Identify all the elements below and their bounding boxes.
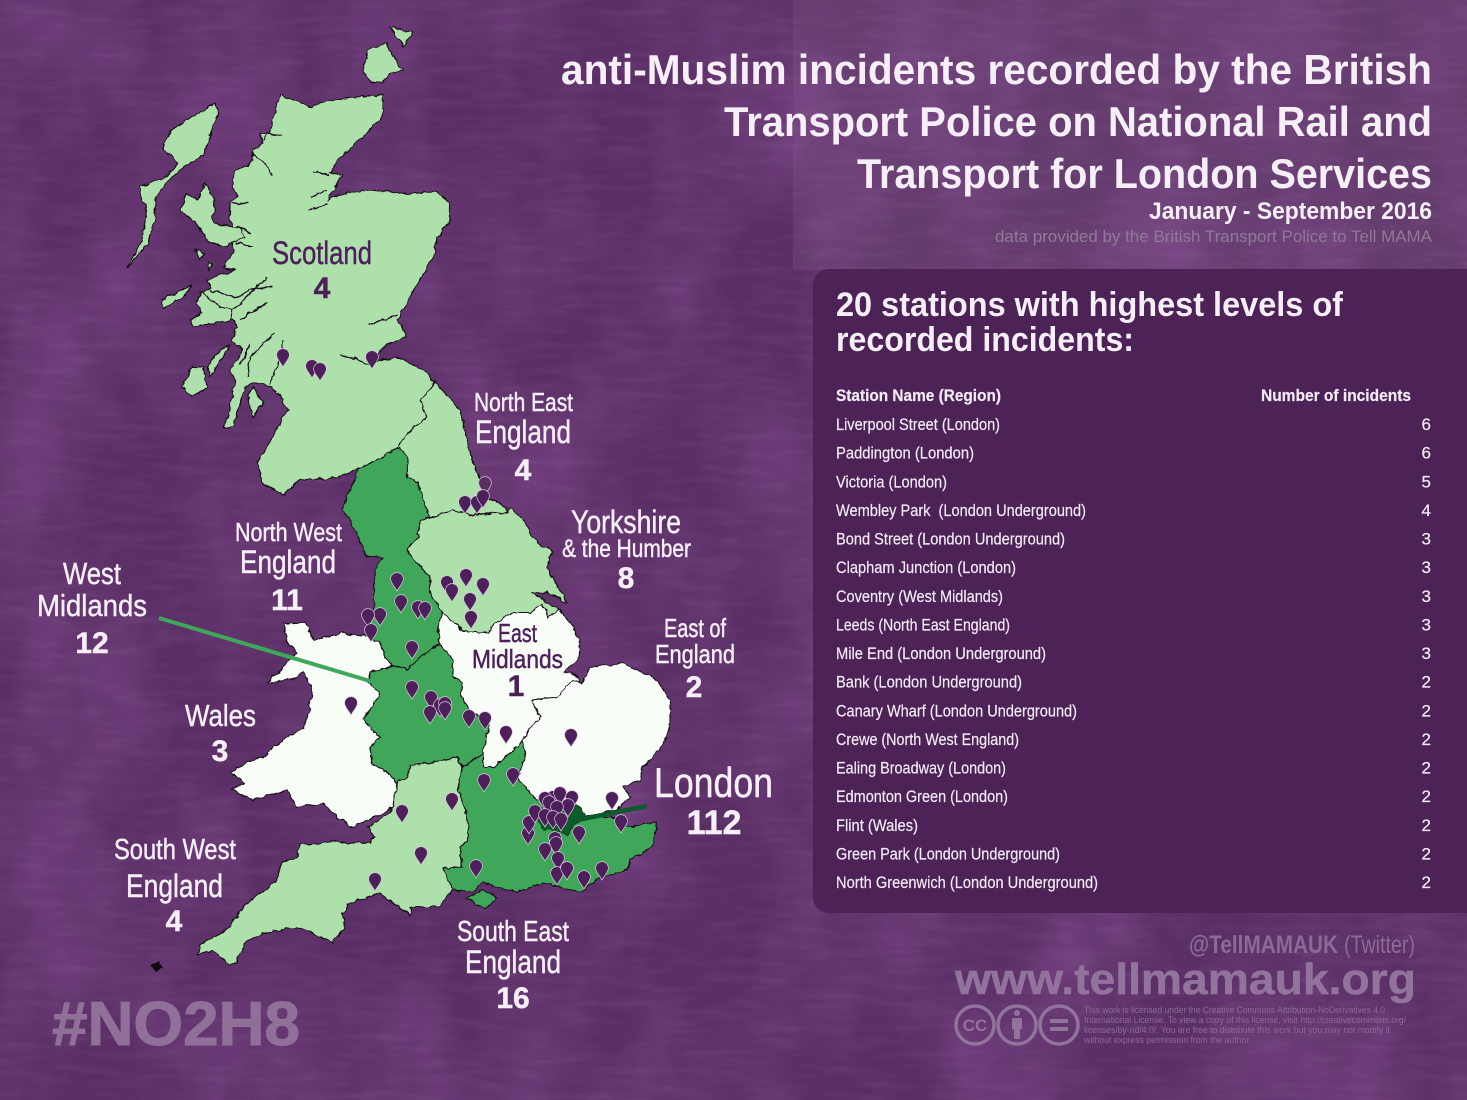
title [561,46,1432,197]
label: South East England [457,916,569,1015]
region: Isle of Wight [467,890,498,909]
table rows: 2 [1422,844,1431,863]
label: South East England: South East [457,916,569,948]
table rows: 2 [1422,701,1431,720]
label: North West England: England [240,544,336,580]
arrow: West Midlands leader line [159,618,370,681]
licence text: This work is licensed under the Creative Commons Attribution-NoDerivatives 4.0 [1084,1005,1385,1015]
label: Scotland [272,235,372,305]
table header: Station Name (Region) [836,386,1001,405]
region: East Midlands [438,603,580,767]
label: Yorkshire and the Humber [562,504,691,595]
table rows: 3 [1422,587,1431,606]
label: East of England: 2 [686,671,702,704]
label: Scotland: Scotland [272,235,372,271]
label: South East England: England [465,944,561,980]
label: London: 112 [687,804,741,842]
label: Wales: Wales [185,698,256,733]
title: anti-Muslim incidents recorded by the British [561,46,1432,93]
label: East Midlands: East [498,618,538,648]
twitter handle: @TellMAMAUK [1189,931,1338,959]
label: North East England: 4 [515,454,532,487]
table rows: 2 [1422,730,1431,749]
title: Transport for London Services [857,150,1432,197]
island: Isles of Scilly [152,962,163,972]
licence text: without express permission from the author. [1083,1035,1251,1045]
table rows: Paddington (London) [836,444,974,463]
table header: Number of incidents [1261,386,1411,405]
licence text: licenses/by-nd/4.0/. You are free to distribute this work but you may not modify it [1084,1025,1390,1035]
table rows: Liverpool Street (London) [836,415,1000,434]
table header [836,386,1411,405]
region: South West England [198,757,468,965]
region: London [537,800,585,835]
label: North West England [235,517,343,617]
region: East of England [518,663,670,817]
table rows: Victoria (London) [836,472,947,491]
arrow: London leader line [568,806,647,822]
label: Yorkshire and the Humber: Yorkshire [571,504,681,540]
table rows: Coventry (West Midlands) [836,587,1003,606]
label: North East England: England [475,414,571,450]
panel: top 20 stations table [813,269,1467,913]
label: West Midlands: 12 [75,627,109,660]
icon: creative commons badges [956,1006,1078,1044]
table rows [836,415,1431,892]
panel heading: recorded incidents: [836,321,1134,359]
label: East of England: England [655,639,735,669]
label: East of England: East of [664,613,727,643]
label: East Midlands [472,618,563,703]
twitter handle: (Twitter) [1344,931,1415,959]
table rows: 2 [1422,759,1431,778]
region: West Midlands [363,645,490,783]
table rows: 3 [1422,558,1431,577]
panel heading [836,286,1344,359]
table rows: 2 [1422,787,1431,806]
label: North West England: 11 [271,584,303,617]
label: North West England: North West [235,517,343,547]
hashtag: #NO2H8 [52,990,300,1059]
table rows: Ealing Broadway (London) [836,759,1006,778]
label: Yorkshire and the Humber: 8 [618,562,634,595]
region: North West England [343,447,443,670]
label: South East England: 16 [496,982,530,1015]
table rows: Crewe (North West England) [836,730,1019,749]
table rows: Green Park (London Underground) [836,844,1060,863]
table rows: Edmonton Green (London) [836,787,1008,806]
table rows: 2 [1422,873,1431,892]
table rows: Bond Street (London Underground) [836,530,1065,549]
table rows: North Greenwich (London Underground) [836,873,1098,892]
label: London [654,759,773,842]
label: East Midlands: 1 [508,670,524,703]
table rows: Mile End (London Underground) [836,644,1046,663]
label: East of England [655,613,735,704]
table rows: 3 [1422,530,1431,549]
panel heading: 20 stations with highest levels of [836,286,1344,324]
table rows: 3 [1422,644,1431,663]
label: Wales: 3 [212,735,228,768]
licence text [1083,1005,1406,1045]
table rows: 6 [1422,444,1431,463]
sea lochs and firths [210,133,397,385]
table rows: 3 [1422,615,1431,634]
table rows: 2 [1422,673,1431,692]
table rows: 6 [1422,415,1431,434]
incident pins [277,349,627,891]
table rows: 2 [1422,816,1431,835]
label: West Midlands [37,556,147,660]
region: North East England [397,382,507,517]
table rows: Canary Wharf (London Underground) [836,701,1077,720]
region: Yorkshire and the Humber [407,508,567,633]
region: Scotland [127,27,450,495]
table rows: Wembley Park (London Underground) [836,501,1086,520]
icon: creative commons badges: CC [963,1016,987,1035]
label: Scotland: 4 [314,272,331,305]
label: West Midlands: West [63,556,121,591]
source note: data provided by the British Transport Police to Tell MAMA [995,227,1433,246]
table rows: Flint (Wales) [836,816,918,835]
region labels [37,235,773,1015]
table rows: 5 [1422,472,1431,491]
region: South East England [443,740,657,892]
subtitle: date range: January - September 2016 [1149,198,1432,225]
table rows: Clapham Junction (London) [836,558,1016,577]
table rows: 4 [1422,501,1431,520]
map of Great Britain by region [127,27,670,972]
label: South West England [114,834,236,938]
region: Wales [230,623,407,827]
label: London: London [654,759,773,806]
label: Yorkshire and the Humber: & the Humber [562,535,691,563]
label: East Midlands: Midlands [472,644,563,674]
label: Wales [185,698,256,768]
table rows: Leeds (North East England) [836,615,1010,634]
label: West Midlands: Midlands [37,588,147,623]
label: South West England: England [126,868,223,904]
label: North East England [474,387,574,487]
label: South West England: 4 [166,905,183,938]
label: South West England: South West [114,834,236,866]
table rows: Bank (London Underground) [836,673,1022,692]
website: www.tellmamauk.org [954,955,1416,1004]
title: Transport Police on National Rail and [724,98,1432,145]
licence text: International License. To view a copy of this license, visit http://creativecommons.org/ [1084,1015,1406,1025]
label: North East England: North East [474,387,574,417]
